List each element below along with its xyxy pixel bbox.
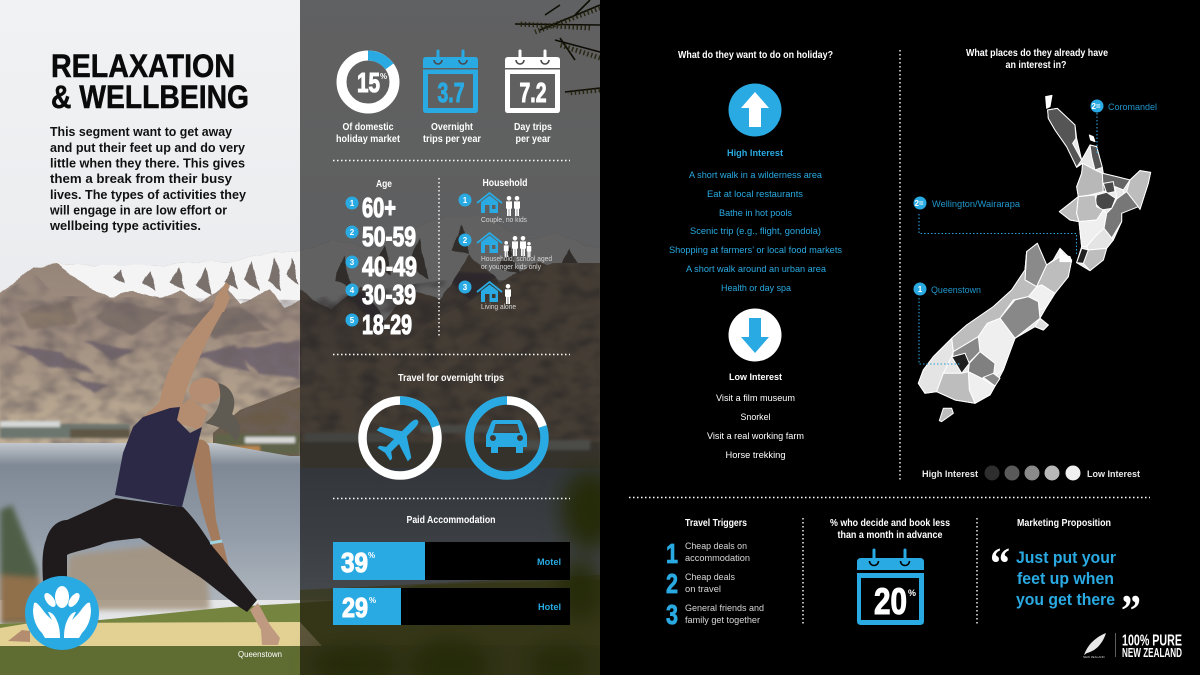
tree branches xyxy=(515,0,600,92)
booking stat: 20%: % who decide and book less xyxy=(830,518,950,529)
travel triggers: General friends and xyxy=(685,603,764,614)
vest top xyxy=(115,407,202,507)
woman in yoga pose xyxy=(8,282,280,645)
map callout: Wellington/Wairarapa: Wellington/Wairarapa xyxy=(932,199,1021,210)
wrist band xyxy=(210,541,222,543)
age ranking: 5 xyxy=(350,316,355,325)
stat: 7.2 day trips per year: per year xyxy=(516,134,551,145)
stat: 15% of domestic holiday market: % xyxy=(380,72,387,81)
village on the shore xyxy=(0,421,600,470)
marketing proposition: Just put your xyxy=(1016,549,1117,567)
high interest activities: Health or day spa xyxy=(721,283,792,294)
heading: what do they want to do: What do they want to do on holiday? xyxy=(678,50,833,61)
stat: 7.2 day trips per year xyxy=(505,51,560,145)
travel for overnight trips: Travel for overnight trips xyxy=(398,373,504,384)
neck and shoulder xyxy=(143,398,208,430)
high interest activities: A short walk around an urban area xyxy=(686,264,827,275)
travel triggers: 3 xyxy=(666,599,678,630)
donut: air travel xyxy=(362,400,438,476)
map legend: Low Interest xyxy=(1087,469,1141,480)
booking stat: 20%: than a month in advance xyxy=(838,530,943,541)
low interest activities: Visit a film museum xyxy=(716,393,795,404)
household ranking: or younger kids only xyxy=(481,262,541,271)
high interest activities: Scenic trip (e.g., flight, gondola) xyxy=(690,226,821,237)
paid accommodation bars: Motel xyxy=(537,557,561,568)
age ranking: 60+ xyxy=(362,192,396,223)
hill on the right xyxy=(213,263,600,472)
logo: 100% Pure New Zealand xyxy=(1083,632,1182,660)
low interest activities: Snorkel xyxy=(740,412,770,423)
marketing proposition xyxy=(990,518,1141,635)
description text: and put their feet up and do very xyxy=(50,140,246,155)
travel triggers: Cheap deals xyxy=(685,572,735,583)
booking stat: 20% xyxy=(830,518,950,625)
low interest activities: Low Interest xyxy=(729,372,783,383)
stat: 7.2 day trips per year: 7.2 xyxy=(520,77,546,108)
icon: lotus in hands xyxy=(25,576,99,650)
map callout: Coromandel xyxy=(1090,100,1157,154)
travel triggers: family get together xyxy=(685,615,760,626)
map callout: Coromandel: 2= xyxy=(1091,102,1101,111)
travel triggers: on travel xyxy=(685,584,721,595)
high interest activities: High Interest xyxy=(727,148,784,159)
marketing proposition: you get there xyxy=(1016,591,1115,609)
description text: will engage in are low effort or xyxy=(49,202,227,218)
age ranking: 18-29 xyxy=(362,309,412,340)
high interest activities: Shopping at farmers’ or local food markets xyxy=(669,245,842,256)
paid accommodation bars: Hotel xyxy=(538,602,561,613)
household ranking: Couple, no kids xyxy=(481,215,527,224)
paid accommodation bars: % xyxy=(368,551,375,560)
right panel black xyxy=(600,0,1200,675)
stat: 15% of domestic holiday market: 15 xyxy=(357,67,380,98)
description text: little when they there. This gives xyxy=(50,156,245,170)
household ranking: 2 xyxy=(463,236,468,245)
marketing proposition: ” xyxy=(1121,586,1141,635)
age ranking: 4 xyxy=(350,286,355,295)
map callout: Queenstown: Queenstown xyxy=(931,285,981,296)
description text xyxy=(49,124,247,233)
paid accommodation bars: Paid Accommodation xyxy=(406,515,496,526)
grass xyxy=(0,580,600,675)
description text: lives. The types of activities they xyxy=(50,187,247,202)
low interest activities: Visit a real working farm xyxy=(707,431,804,442)
travel triggers: Cheap deals on xyxy=(685,541,747,552)
high interest activities: Eat at local restaurants xyxy=(707,189,803,200)
map of New Zealand xyxy=(918,95,1151,422)
lake xyxy=(0,443,600,600)
stat: 3.7 overnight trips per year: Overnight xyxy=(431,122,474,133)
low interest activities: Horse trekking xyxy=(726,450,786,461)
head xyxy=(189,378,221,404)
age ranking: Age xyxy=(376,179,392,190)
map callout: Queenstown xyxy=(914,282,981,364)
icon: up arrow xyxy=(728,84,782,136)
stat: 7.2 day trips per year: Day trips xyxy=(514,122,552,133)
map callout: Coromandel: Coromandel xyxy=(1108,102,1157,113)
booking stat: 20%: % xyxy=(908,588,916,598)
age ranking: 3 xyxy=(350,258,355,267)
caption: Queenstown: Queenstown xyxy=(238,649,282,659)
age ranking: 50-59 xyxy=(362,221,416,252)
travel triggers xyxy=(666,518,764,630)
heading: places of interest: What places do they already have xyxy=(966,48,1108,59)
household ranking: Household xyxy=(482,178,528,189)
yoga mat xyxy=(0,622,322,646)
map legend xyxy=(922,466,1141,480)
household ranking: Household, school aged xyxy=(481,254,552,263)
stat: 3.7 overnight trips per year xyxy=(423,51,481,145)
high interest activities xyxy=(669,84,842,294)
age ranking: 40-49 xyxy=(362,251,417,282)
map callout: Wellington/Wairarapa: 2= xyxy=(914,199,924,208)
heading: places of interest: an interest in? xyxy=(1006,60,1066,71)
raised arm xyxy=(150,304,224,420)
description text: This segment want to get away xyxy=(50,124,233,139)
out-of-focus foliage xyxy=(310,470,618,675)
hair xyxy=(205,383,240,441)
travel triggers: accommodation xyxy=(685,553,750,564)
household ranking xyxy=(458,178,552,311)
age ranking: 2 xyxy=(350,228,355,237)
marketing proposition: Marketing Proposition xyxy=(1017,518,1111,529)
travel triggers: 2 xyxy=(666,568,678,599)
mountain texture xyxy=(0,276,505,443)
household ranking: Living alone xyxy=(481,302,516,311)
age ranking xyxy=(346,179,417,340)
title xyxy=(51,48,249,115)
background photo: yoga by the lake xyxy=(0,0,630,675)
low interest activities xyxy=(707,308,804,461)
age ranking: 1 xyxy=(350,199,355,208)
description text: wellbeing type activities. xyxy=(49,218,201,233)
icon: down arrow xyxy=(728,308,782,362)
high interest activities: A short walk in a wilderness area xyxy=(689,170,823,181)
leggings xyxy=(42,498,257,612)
map legend: High Interest xyxy=(922,469,979,480)
household ranking: 1 xyxy=(463,196,468,205)
marketing proposition: feet up when xyxy=(1017,570,1114,588)
shrubs xyxy=(0,505,210,625)
icon: silver fern: NEW ZEALAND xyxy=(1083,655,1106,659)
paid accommodation bars: 29 xyxy=(342,592,368,623)
age ranking: 30-39 xyxy=(362,279,416,310)
stat: 3.7 overnight trips per year: 3.7 xyxy=(438,77,464,108)
household ranking: 3 xyxy=(463,283,468,292)
stat: 15% of domestic holiday market: Of domestic xyxy=(342,122,394,133)
left panel scrim xyxy=(300,0,600,675)
mountain range xyxy=(0,217,630,450)
map callout: Wellington/Wairarapa xyxy=(914,196,1076,255)
description text: them a break from their busy xyxy=(50,171,233,186)
foot and ankle xyxy=(250,603,280,645)
donut: car travel xyxy=(470,400,544,476)
booking stat: 20%: 20 xyxy=(874,581,907,622)
stat: 15% of domestic holiday market: holiday market xyxy=(336,134,401,145)
title: RELAXATION xyxy=(51,48,235,84)
travel for overnight trips xyxy=(362,373,544,476)
stat: 3.7 overnight trips per year: trips per year xyxy=(423,134,481,145)
paid accommodation bars: 39 xyxy=(341,547,368,578)
high interest activities: Bathe in hot pools xyxy=(719,208,792,219)
marketing proposition: “ xyxy=(990,539,1010,588)
travel triggers: Travel Triggers xyxy=(685,518,747,529)
heading: places of interest xyxy=(966,48,1108,71)
paid accommodation bars xyxy=(333,515,570,625)
title: & WELLBEING xyxy=(51,79,249,115)
stat: 15% of domestic holiday market xyxy=(336,56,401,145)
map callout: Queenstown: 1 xyxy=(918,285,923,294)
travel triggers: 1 xyxy=(666,538,678,569)
supporting arm xyxy=(192,439,222,547)
paid accommodation bars: % xyxy=(369,596,376,605)
